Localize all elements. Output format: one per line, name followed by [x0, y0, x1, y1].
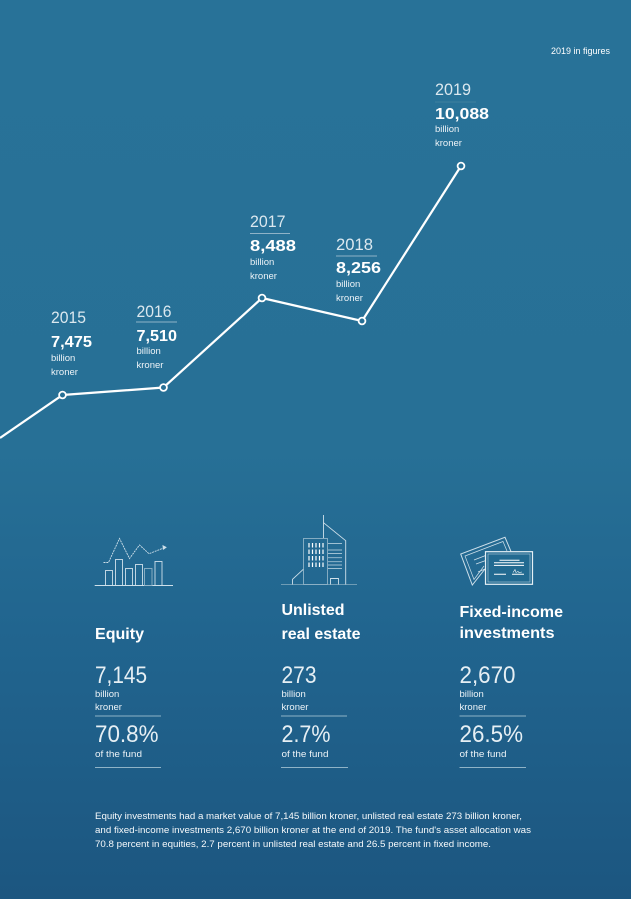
stat: fixed-income value: [460, 662, 526, 716]
stat: fixed-income share: 26.5%: [460, 721, 523, 748]
stat: equity value: billion: [95, 689, 119, 700]
data label: 2015: kroner: [51, 367, 78, 378]
data label: 2019: 2019: [435, 81, 471, 99]
panel: fixed-income investments: [460, 537, 563, 768]
panel: unlisted real estate: [281, 515, 361, 768]
data label: 2019: [435, 81, 489, 149]
stat: real estate value: kroner: [282, 702, 308, 713]
summary text block: 70.8 percent in equities, 2.7 percent in unlisted real estate and 26.5 percent in fixed income.: [95, 839, 491, 850]
summary text block: [95, 811, 531, 850]
data label: 2015: 2015: [51, 309, 86, 327]
stat: fixed-income share: of the fund: [460, 749, 506, 760]
stat: real estate share: of the fund: [282, 749, 328, 760]
icon: bond certificates: [461, 537, 532, 585]
line chart: fund value 2015-2019: [0, 163, 464, 438]
data label: 2019: 10,088: [435, 106, 489, 123]
heading: unlisted real estate: [282, 602, 361, 643]
stat: equity value: 7,145: [95, 662, 147, 689]
stat: equity share: 70.8%: [95, 721, 158, 748]
data label: 2018: billion: [336, 279, 360, 290]
stat: real estate value: [281, 662, 347, 716]
data label: 2016: kroner: [136, 360, 163, 371]
heading: unlisted real estate: Unlisted: [282, 602, 344, 619]
data label: 2017: [250, 213, 296, 282]
data label: 2015: 7,475: [51, 334, 92, 351]
summary text block: Equity investments had a market value of 7,145 billion kroner, unlisted real estate 273 billion kroner,: [95, 811, 522, 822]
stat: equity share: of the fund: [95, 749, 142, 760]
data label: 2016: billion: [136, 346, 161, 357]
data label: 2017: 2017: [250, 213, 286, 231]
data label: 2016: 7,510: [136, 328, 177, 345]
stat: fixed-income value: 2,670: [460, 662, 516, 689]
stat: equity share: [95, 721, 161, 768]
data label: 2016: [136, 303, 177, 371]
data label: 2019: kroner: [435, 138, 462, 149]
data label: 2017: billion: [250, 257, 274, 268]
data label: 2017: kroner: [250, 271, 277, 282]
data label: 2018: kroner: [336, 293, 363, 304]
heading: fixed-income investments: Fixed-income: [460, 604, 563, 621]
heading: fixed-income investments: [460, 604, 563, 642]
heading: equity: Equity: [95, 626, 144, 643]
stat: real estate value: 273: [282, 662, 316, 689]
stat: real estate value: billion: [282, 689, 306, 700]
heading: fixed-income investments: investments: [460, 625, 555, 642]
data label: 2015: billion: [51, 353, 75, 364]
stat: equity value: [95, 662, 161, 716]
data label: 2019: billion: [435, 124, 459, 135]
data label: 2017: 8,488: [250, 238, 296, 255]
page label: 2019 in figures: [551, 46, 610, 56]
panel: equity: [95, 538, 173, 768]
summary text block: and fixed-income investments 2,670 billion kroner at the end of 2019. The fund's asset allocation was: [95, 825, 531, 836]
stat: real estate share: [281, 721, 348, 768]
icon: bar chart with trend line: [95, 538, 173, 586]
stat: fixed-income value: billion: [460, 689, 484, 700]
stat: fixed-income value: kroner: [460, 702, 486, 713]
data label: 2016: 2016: [136, 303, 172, 321]
data label: 2018: 2018: [336, 236, 373, 254]
stat: fixed-income share: [460, 721, 526, 768]
stat: real estate share: 2.7%: [282, 721, 330, 748]
stat: equity value: kroner: [95, 702, 122, 713]
icon: office buildings: [281, 515, 357, 584]
data label: 2015: [51, 309, 92, 378]
data label: 2018: [336, 236, 381, 304]
heading: unlisted real estate: real estate: [282, 626, 361, 643]
data label: 2018: 8,256: [336, 260, 381, 277]
